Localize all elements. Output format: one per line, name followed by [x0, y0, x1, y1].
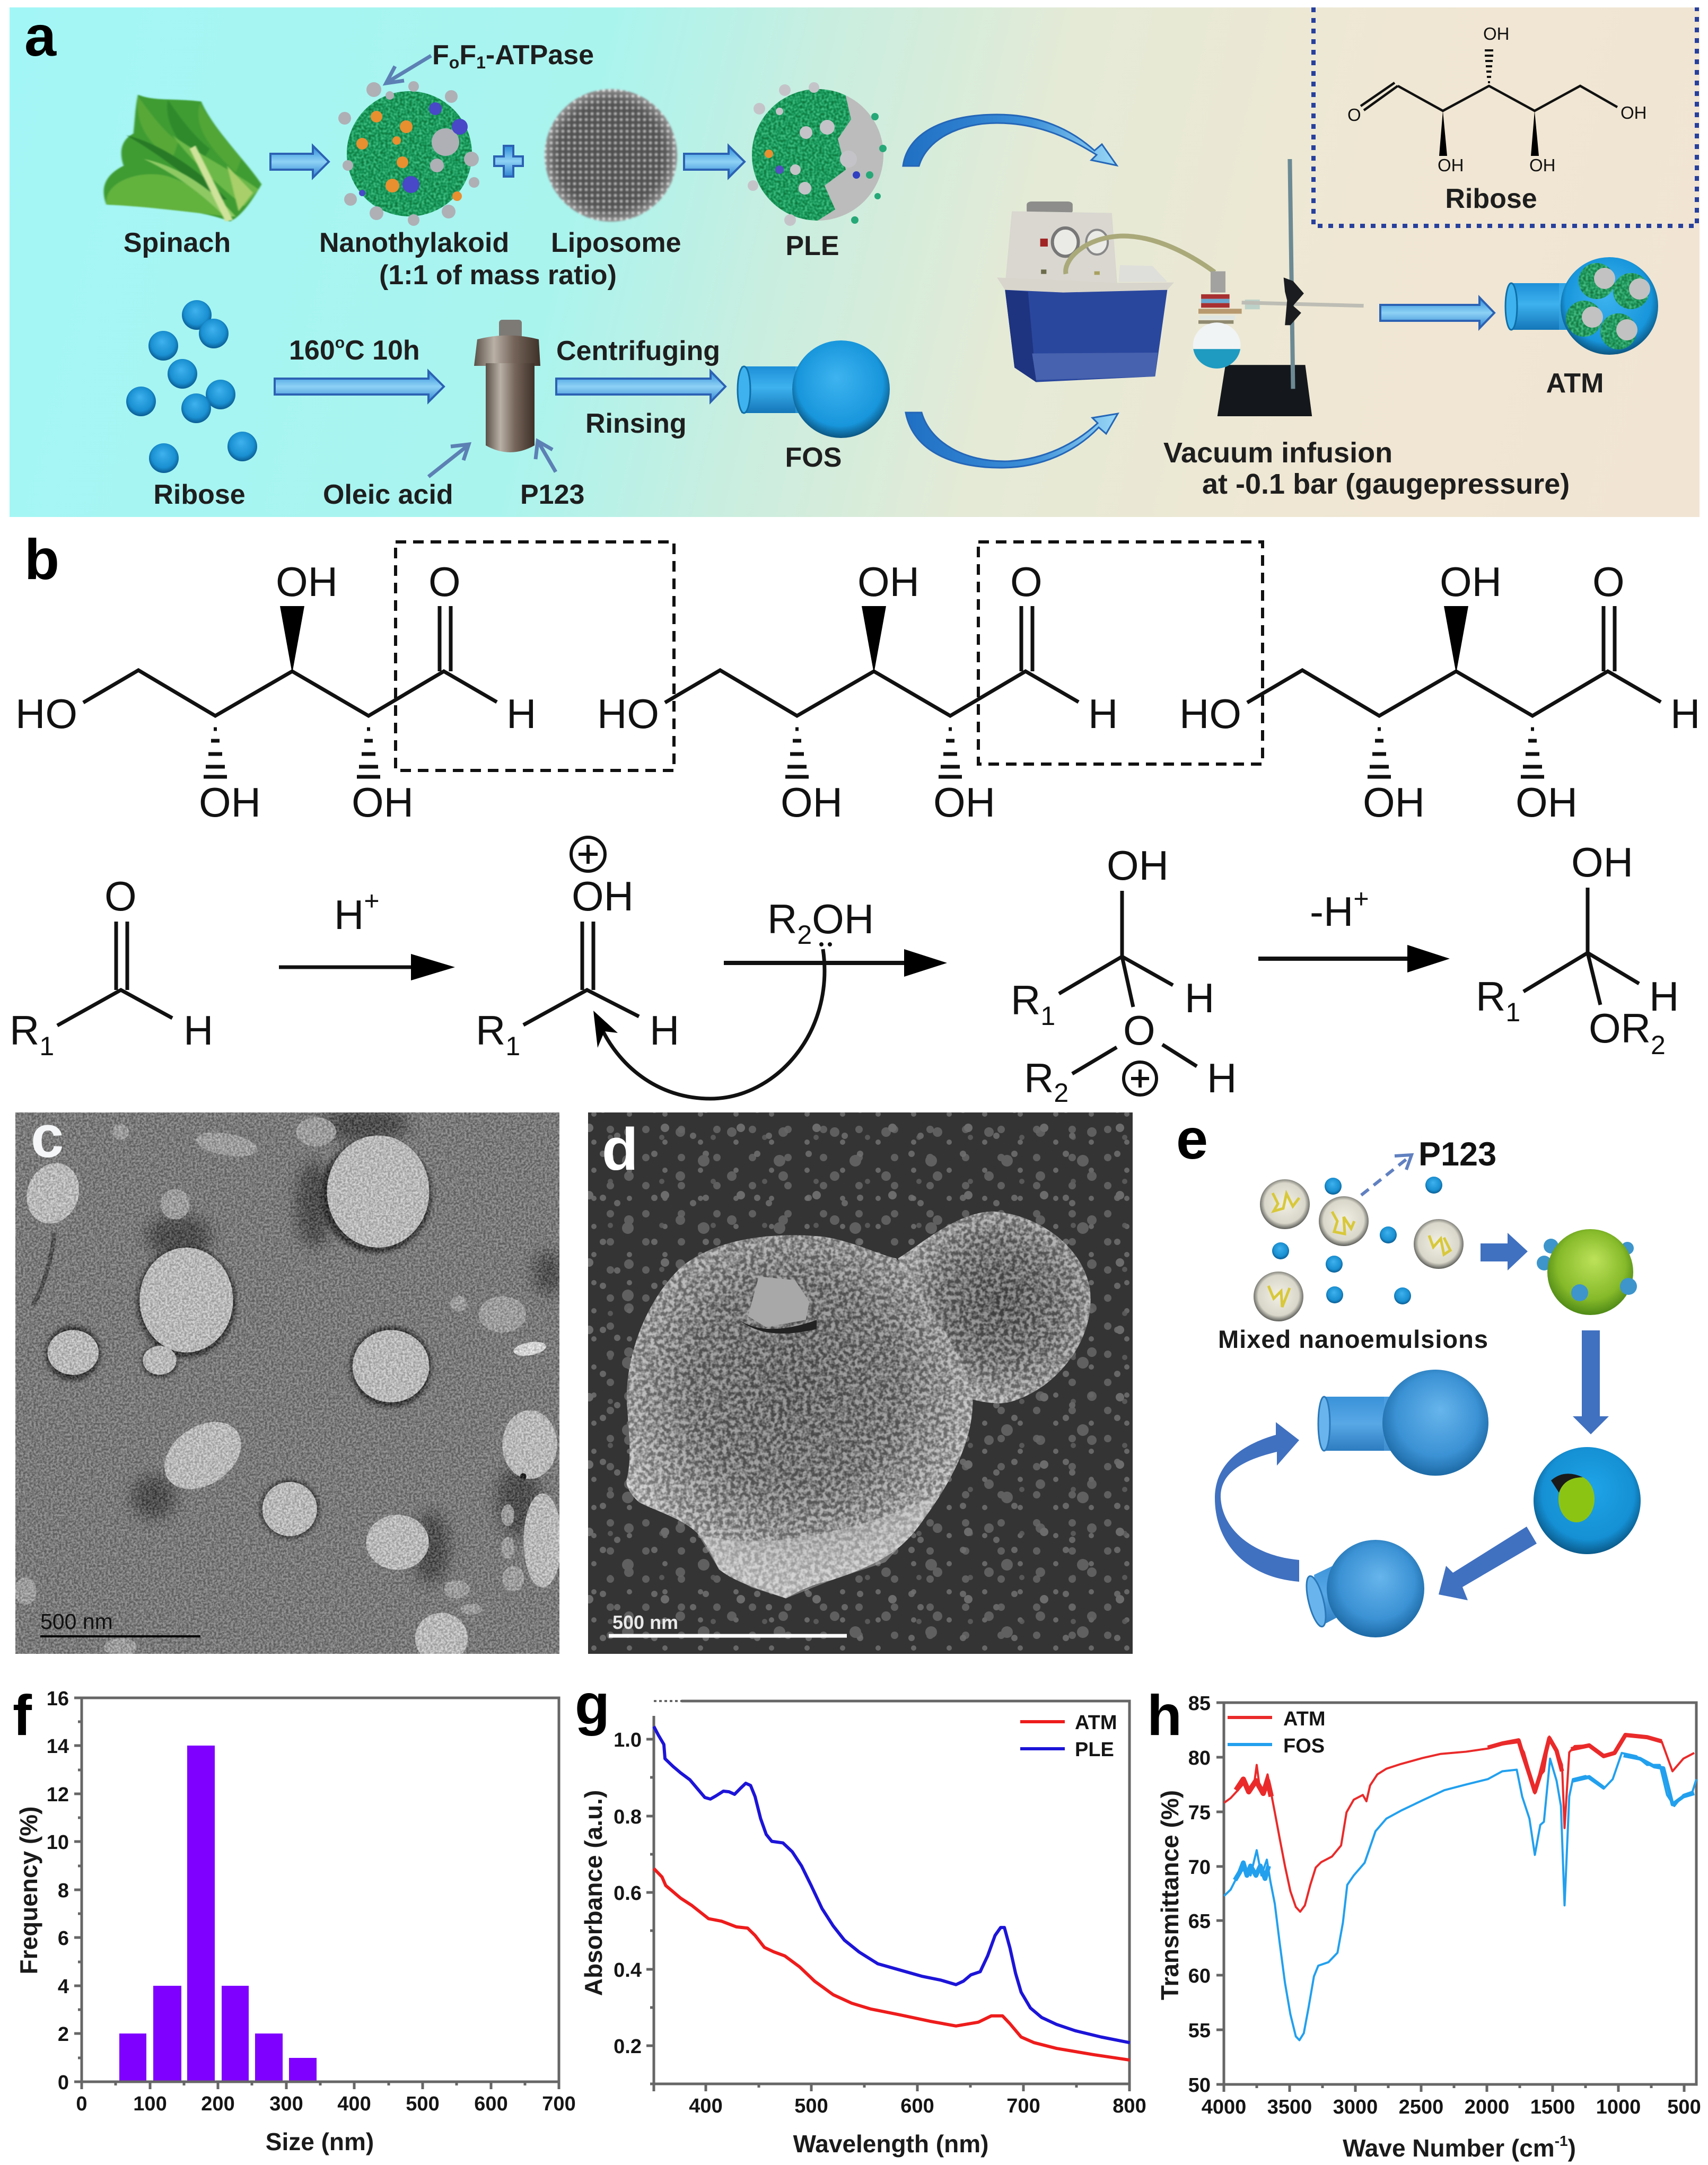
arrow: reactor to FOS — [556, 371, 725, 402]
scale bar c: 500 nm — [40, 1609, 113, 1634]
molecule 1: OH — [352, 779, 414, 826]
x tick labels: 500 — [794, 2095, 828, 2117]
mechanism: oxonium intermediate — [1011, 842, 1237, 1108]
arrow: protonation — [279, 886, 455, 980]
labels: panel a text: Oleic acid — [323, 479, 453, 510]
x tick labels: 600 — [474, 2093, 508, 2115]
label: FoF1-ATPase: -ATPase — [486, 40, 594, 71]
legend: PLE — [1075, 1739, 1114, 1761]
molecule 2: OH — [857, 558, 919, 605]
y tick labels — [614, 1729, 642, 2058]
molecule 1: OH — [199, 779, 261, 826]
arrow: deprotonation — [1258, 884, 1450, 972]
label: FoF1-ATPase: F — [459, 40, 476, 71]
y tick labels: 65 — [1188, 1910, 1211, 1933]
molecule 2: HO — [597, 690, 659, 737]
legend — [1020, 1712, 1117, 1761]
labels: panel a text: Centrifuging — [556, 336, 720, 366]
mechanism: aldehyde: 1 — [39, 1031, 54, 1061]
label: 160C 10h: 160 — [289, 335, 335, 366]
arrow: nucleophilic addition: R — [767, 896, 797, 942]
arrow: FoF1-ATPase pointer — [386, 56, 431, 83]
icon: ATM flask loaded with PLE — [1505, 257, 1658, 355]
mechanism: hemiacetal product: R — [1476, 973, 1505, 1020]
x tick labels — [1202, 2096, 1701, 2118]
panel label e: e — [1176, 1107, 1208, 1171]
panel label g: g — [575, 1672, 610, 1736]
mechanism: hemiacetal product: OR — [1589, 1005, 1651, 1051]
molecule 3: OH — [1516, 779, 1578, 826]
label: P123: P123 — [1418, 1136, 1496, 1173]
icon: PLE hybrid sphere — [742, 82, 887, 228]
labels: panel a text: PLE — [785, 231, 839, 261]
x tick labels: 500 — [406, 2093, 440, 2115]
axis titles: -1 — [1555, 2133, 1568, 2149]
mechanism: oxonium intermediate: O — [1123, 1007, 1155, 1054]
x tick labels: 700 — [1006, 2095, 1040, 2117]
panel label d: d — [602, 1116, 638, 1182]
icon: spinach — [104, 95, 261, 222]
panel f: size histogram — [13, 1683, 576, 2155]
panel label c: c — [31, 1103, 64, 1170]
axes — [646, 1701, 1129, 2091]
x tick labels: 400 — [689, 2095, 723, 2117]
x tick labels — [689, 2095, 1146, 2117]
molecule 2: H — [1088, 690, 1118, 737]
panel h: FTIR spectra — [1147, 1683, 1701, 2162]
molecule 2: OH — [933, 779, 995, 826]
legend: ATM — [1075, 1712, 1117, 1734]
arrow: nucleophilic addition: OH — [812, 896, 874, 942]
molecule 1 — [15, 558, 536, 826]
icon: nanothylakoid sphere — [338, 81, 479, 226]
x tick labels: 200 — [201, 2093, 235, 2115]
inset: ribose structure — [1313, 7, 1697, 226]
arrow: deprotonation: + — [1353, 884, 1369, 914]
y tick labels: 0.4 — [614, 1959, 642, 1982]
arrow: protonation: H — [334, 891, 364, 938]
icon: ribose spheres — [126, 300, 257, 473]
inset: ribose structure: OH — [1483, 24, 1509, 43]
inset: ribose structure: OH — [1621, 103, 1647, 122]
panel c: TEM micrograph — [15, 1103, 563, 1663]
icon: liposome sphere — [545, 89, 677, 222]
dashed highlight boxes — [396, 542, 1263, 770]
inset: ribose structure: OH — [1529, 155, 1556, 175]
x tick labels: 400 — [337, 2093, 371, 2115]
arrow: liposome to PLE — [684, 146, 744, 178]
x tick labels: 100 — [133, 2093, 167, 2115]
labels: panel a text: ATM — [1546, 368, 1604, 399]
panel label f: f — [13, 1683, 32, 1747]
x tick labels: 1000 — [1596, 2096, 1641, 2118]
label: FoF1-ATPase: F — [432, 40, 449, 71]
y tick labels: 14 — [47, 1735, 69, 1758]
arrow: ribose to reactor — [275, 371, 444, 402]
mechanism: oxonium intermediate: H — [1207, 1055, 1237, 1101]
x tick labels: 300 — [269, 2093, 303, 2115]
inset: ribose structure: OH — [1438, 155, 1464, 175]
panel label h: h — [1147, 1683, 1182, 1747]
curved arrow: growth — [1215, 1422, 1299, 1582]
y tick labels: 0.2 — [614, 2036, 642, 2058]
line chart: FTIR curves — [1224, 1735, 1696, 2040]
labels: panel a text: (1:1 of mass ratio) — [379, 260, 617, 291]
icon: P123 micelle dots — [1272, 1177, 1442, 1304]
label: 160C 10h: C 10h — [345, 335, 420, 366]
x tick labels: 2500 — [1399, 2096, 1443, 2118]
inset: ribose structure: O — [1347, 105, 1361, 125]
line chart: PLE and ATM curves — [654, 1726, 1130, 2060]
legend: ATM — [1283, 1708, 1326, 1730]
y tick labels: 85 — [1188, 1693, 1211, 1715]
molecule 2: OH — [781, 779, 843, 826]
y tick labels: 70 — [1188, 1856, 1211, 1879]
panel a: preparation schematic — [10, 4, 1700, 517]
axis titles: ) — [1568, 2134, 1576, 2162]
labels: panel a text: at -0.1 bar (gaugepressure) — [1202, 468, 1570, 500]
mechanism: aldehyde — [10, 873, 213, 1061]
curved arrow: FOS to pump — [906, 413, 1118, 468]
mechanism: oxonium intermediate: R — [1011, 977, 1040, 1023]
molecule 3: O — [1592, 558, 1625, 605]
label: FoF1-ATPase: 1 — [476, 53, 486, 72]
mechanism: protonated aldehyde — [476, 837, 679, 1061]
mechanism: hemiacetal product: 2 — [1651, 1030, 1666, 1060]
arrow: oleic acid pointer — [428, 444, 469, 477]
labels: panel a text — [124, 227, 1604, 510]
label: ribose title: Ribose — [1445, 183, 1537, 214]
molecule 2 — [597, 558, 1118, 826]
icon: vacuum pump and stand — [997, 159, 1364, 416]
y tick labels: 6 — [58, 1927, 69, 1950]
x tick labels: 500 — [1667, 2096, 1701, 2118]
x tick labels: 3500 — [1267, 2096, 1312, 2118]
labels: panel a text: Nanothylakoid — [319, 227, 509, 258]
panel g: absorbance spectra — [575, 1672, 1146, 2158]
arrow: dashed P123 pointer — [1361, 1155, 1412, 1195]
icon: nanoemulsion droplets — [1254, 1179, 1464, 1321]
mechanism: oxonium intermediate: R — [1024, 1055, 1054, 1101]
x tick labels — [76, 2093, 576, 2115]
mechanism: hemiacetal product: 1 — [1505, 997, 1520, 1027]
y tick labels: 16 — [47, 1688, 69, 1710]
panel f: size histogram: Frequency (%) — [15, 1807, 42, 1974]
scale bar d: 500 nm — [612, 1611, 678, 1633]
mechanism: oxonium intermediate: 2 — [1054, 1078, 1068, 1108]
molecule 1: OH — [276, 558, 338, 605]
mechanism: protonated aldehyde: R — [476, 1007, 505, 1054]
label: mixed nanoemulsions: Mixed nanoemulsions — [1218, 1325, 1488, 1353]
y tick labels: 0.8 — [614, 1806, 642, 1828]
x tick labels: 700 — [542, 2093, 576, 2115]
panel e: formation schematic — [1176, 1107, 1641, 1637]
mechanism: protonated aldehyde: OH — [572, 873, 634, 919]
axis titles: Wave Number (cm — [1343, 2134, 1555, 2162]
arrow: downward — [1573, 1330, 1609, 1434]
mechanism: hemiacetal product: H — [1649, 973, 1679, 1020]
molecule 3: OH — [1440, 558, 1502, 605]
y tick labels: 80 — [1188, 1747, 1211, 1769]
histogram bars — [119, 1746, 317, 2082]
arrow: nucleophilic addition: 2 — [797, 920, 812, 950]
x tick labels: 600 — [900, 2095, 934, 2117]
mechanism: protonated aldehyde: 1 — [505, 1031, 520, 1061]
y tick labels: 55 — [1188, 2020, 1211, 2042]
labels: panel a text: P123 — [520, 479, 584, 510]
axes — [74, 1698, 559, 2089]
arrow: P123 pointer — [536, 441, 556, 472]
x tick labels: 2000 — [1465, 2096, 1509, 2118]
arrow: protonation: + — [364, 886, 380, 916]
icon: blue sphere with green core — [1534, 1447, 1641, 1554]
arrow: spinach to nanothylakoid — [270, 146, 329, 178]
arrow: deprotonation: -H — [1310, 888, 1353, 935]
mechanism: aldehyde: H — [183, 1007, 213, 1054]
y tick labels: 2 — [58, 2023, 69, 2046]
mechanism: hemiacetal product: OH — [1571, 839, 1633, 886]
legend — [1228, 1708, 1326, 1757]
molecule 2: O — [1010, 558, 1043, 605]
molecule 3: OH — [1363, 779, 1425, 826]
mechanism: hemiacetal product — [1476, 839, 1679, 1060]
label: 160C 10h: o — [335, 334, 345, 352]
legend: FOS — [1283, 1735, 1325, 1757]
curved attack arrow — [593, 949, 825, 1099]
plus sign — [494, 146, 523, 177]
axis titles: Wavelength (nm) — [793, 2130, 988, 2158]
y tick labels: 10 — [47, 1831, 69, 1854]
x tick labels: 800 — [1113, 2095, 1146, 2117]
x tick labels: 3000 — [1333, 2096, 1378, 2118]
arrow: to coated droplet — [1481, 1233, 1528, 1270]
molecule 1: O — [428, 558, 461, 605]
mechanism: aldehyde: O — [104, 873, 137, 919]
molecule 3: H — [1670, 690, 1700, 737]
x tick labels: 4000 — [1202, 2096, 1246, 2118]
molecule 3: HO — [1179, 690, 1241, 737]
panel label a: a — [24, 4, 57, 68]
y tick labels: 1.0 — [614, 1729, 642, 1751]
labels: panel a text: Rinsing — [585, 408, 687, 439]
icon: long-neck flask — [1318, 1370, 1488, 1476]
mechanism: oxonium intermediate: OH — [1107, 842, 1169, 889]
y tick labels: 12 — [47, 1784, 69, 1806]
curved arrow: PLE to pump — [903, 115, 1117, 166]
labels: panel a text: Liposome — [551, 227, 681, 258]
icon: FOS flask particle — [738, 340, 890, 438]
y tick labels: 8 — [58, 1880, 69, 1902]
y tick labels: 50 — [1188, 2074, 1211, 2097]
arrow: infusion to ATM — [1380, 297, 1494, 328]
y tick labels — [1188, 1693, 1211, 2097]
labels: panel a text: Vacuum infusion — [1163, 437, 1392, 469]
icon: short-neck flask — [1303, 1540, 1424, 1637]
label: FoF1-ATPase: o — [449, 53, 459, 72]
panel h: FTIR spectra: Transmittance (%) — [1156, 1790, 1184, 2000]
panel g: absorbance spectra: Absorbance (a.u.) — [580, 1790, 607, 1996]
panel d: SEM micrograph — [588, 1112, 1133, 1654]
y tick labels: 75 — [1188, 1802, 1211, 1824]
mechanism: protonated aldehyde: H — [650, 1007, 679, 1054]
x tick labels: 1500 — [1530, 2096, 1575, 2118]
labels: panel a text: Spinach — [124, 227, 231, 258]
axes — [1216, 1703, 1696, 2092]
molecule 3 — [1179, 558, 1700, 826]
arrow: diagonal — [1439, 1527, 1537, 1600]
icon: hydrothermal reactor — [474, 320, 540, 452]
y tick labels — [47, 1688, 69, 2094]
icon: green droplet with dots — [1537, 1229, 1637, 1315]
mechanism: aldehyde: R — [10, 1007, 39, 1054]
y tick labels: 0 — [58, 2072, 69, 2094]
panel b: chemical structures and mechanism — [10, 527, 1700, 1108]
molecule 1: HO — [15, 690, 77, 737]
x tick labels: 0 — [76, 2093, 87, 2115]
labels: panel a text: Ribose — [153, 479, 246, 510]
y tick labels: 60 — [1188, 1965, 1211, 1987]
axis titles: Size (nm) — [266, 2128, 374, 2155]
y tick labels: 4 — [58, 1976, 69, 1998]
arrow: nucleophilic addition — [724, 896, 947, 977]
molecule 1: H — [506, 690, 536, 737]
labels: panel a text: FOS — [785, 442, 842, 473]
mechanism: oxonium intermediate: 1 — [1040, 1001, 1055, 1031]
mechanism: oxonium intermediate: H — [1185, 975, 1214, 1021]
y tick labels: 0.6 — [614, 1882, 642, 1905]
panel label b: b — [24, 527, 59, 591]
